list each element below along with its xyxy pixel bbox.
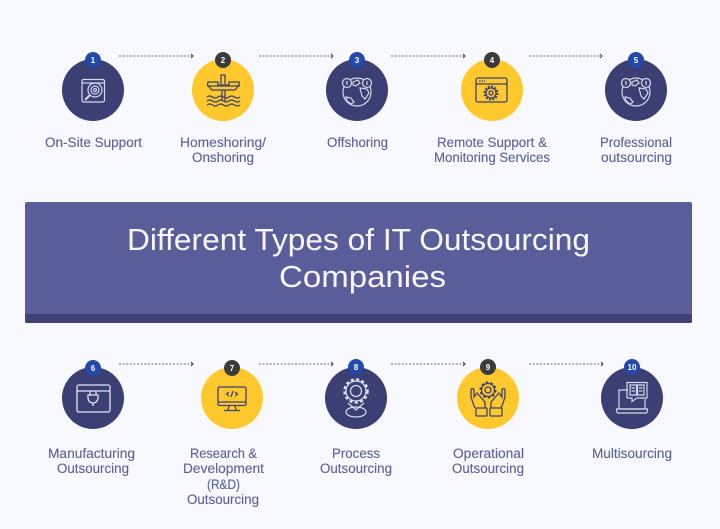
icon: ship on waves [207,75,240,106]
item 7: Research & Development (R&D) Outsourcing: Outsourcing [187,492,259,507]
item 6: Manufacturing Outsourcing: Outsourcing [57,461,129,476]
item 7: Research & Development (R&D) Outsourcing: 7 [230,364,235,373]
item 9: Operational Outsourcing: Outsourcing [452,461,524,476]
icon: browser window with gear [476,78,507,102]
item 6: Manufacturing Outsourcing: Manufacturing [48,446,135,461]
item 10: Multisourcing: Multisourcing [592,446,672,461]
arrow 1 to 2 [119,54,193,58]
item 2: Homeshoring / Onshoring: Homeshoring/ [180,135,266,150]
item 7: Research & Development (R&D) Outsourcing: Research & [190,446,257,461]
icon: target search window [82,80,104,102]
item 8: Process Outsourcing [320,359,392,476]
item 1: On-Site Support [45,52,142,150]
item 2: Homeshoring / Onshoring [180,52,266,165]
item 8: Process Outsourcing: 8 [354,363,359,372]
arrow 9 to 10 [529,362,603,366]
banner title: Different Types of IT Outsourcing [127,222,590,257]
icon: globe with pins [342,78,372,106]
item 3: Offshoring: 3 [355,56,360,65]
item 6: Manufacturing Outsourcing: 6 [91,364,96,373]
item 7: Research & Development (R&D) Outsourcing [183,360,264,507]
banner panel [25,202,692,323]
item 3: Offshoring: Offshoring [327,135,388,150]
item 4: Remote Support & Monitoring Services: Monitoring Services [434,150,550,165]
item 5: Professional outsourcing: Professional [600,135,672,150]
banner title: Companies [279,259,446,294]
item 4: Remote Support & Monitoring Services: Remote Support & [437,135,547,150]
arrow 2 to 3 [259,54,333,58]
item 10: Multisourcing: 10 [628,363,637,372]
item 7: Research & Development (R&D) Outsourcing: (R&D) [207,477,240,492]
item 4: Remote Support & Monitoring Services: 4 [490,56,495,65]
item 5: Professional outsourcing: outsourcing [601,150,672,165]
icon: monitor with code [218,387,246,410]
arrow 3 to 4 [391,54,465,58]
item 9: Operational Outsourcing: Operational [453,446,524,461]
item 5: Professional outsourcing [600,52,672,165]
icon: gear location pin [344,380,368,417]
icon: window with plug [77,385,110,412]
item 2: Homeshoring / Onshoring: Onshoring [192,150,254,165]
icon: laptop with book [616,382,648,413]
arrow 7 to 8 [259,362,333,366]
item 8: Process Outsourcing: Outsourcing [320,461,392,476]
arrow 8 to 9 [391,362,465,366]
item 1: On-Site Support: On-Site Support [45,135,142,150]
item 8: Process Outsourcing: Process [332,446,380,461]
item 9: Operational Outsourcing: 9 [486,363,491,372]
item 9: Operational Outsourcing [452,359,524,476]
arrow 6 to 7 [119,362,193,366]
item 5: Professional outsourcing: 5 [634,56,639,65]
arrow 4 to 5 [529,54,602,58]
item 10: Multisourcing [592,359,672,461]
icon: hands holding gear [471,382,505,416]
item 1: On-Site Support: 1 [91,56,96,65]
item 3: Offshoring [326,52,388,150]
banner title [127,222,590,294]
item 7: Research & Development (R&D) Outsourcing: Development [183,461,264,476]
item 6: Manufacturing Outsourcing [48,360,135,476]
item 4: Remote Support & Monitoring Services [434,52,550,165]
item 2: Homeshoring / Onshoring: 2 [221,56,226,65]
icon: globe with pins [622,78,650,106]
